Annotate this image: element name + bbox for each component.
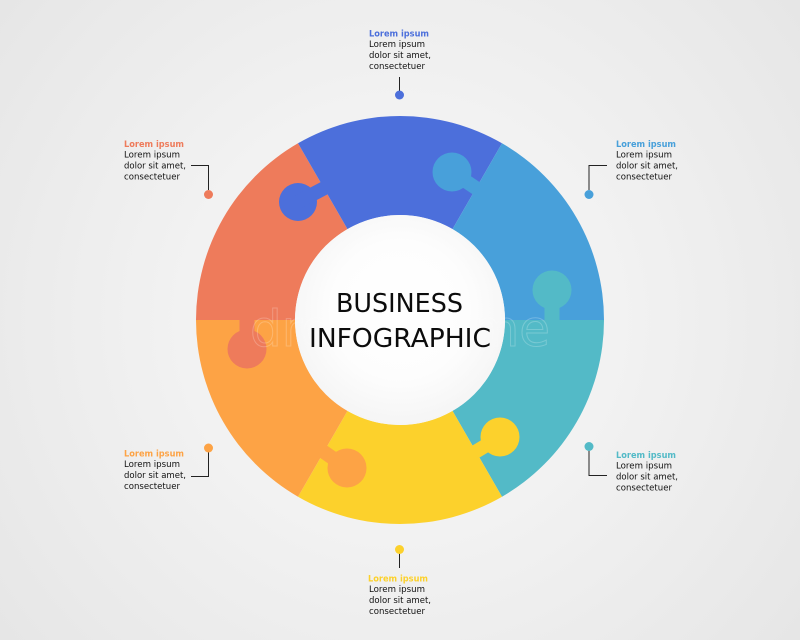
- puzzle knob: light blue: [432, 152, 480, 192]
- callout: top blue: Lorem ipsum: [369, 39, 425, 50]
- puzzle knob: yellow: [472, 418, 520, 456]
- callout: upper right light blue: Lorem ipsum: [616, 150, 672, 160]
- callout: top blue: dolor sit amet,: [369, 50, 431, 61]
- callout: lower right teal: consectetuer: [616, 482, 672, 494]
- callout: lower left orange: consectetuer: [124, 481, 180, 492]
- segment: red-orange: [196, 143, 348, 320]
- segment: orange: [196, 320, 348, 497]
- center title: INFOGRAPHIC: [309, 324, 491, 354]
- center title: BUSINESS: [336, 289, 463, 319]
- puzzle ring chart: [196, 116, 604, 524]
- callout: upper right light blue: [584, 139, 678, 199]
- callout: upper right light blue: Lorem ipsum: [616, 139, 676, 150]
- callout: lower right teal: dolor sit amet,: [616, 472, 678, 482]
- center circle: [295, 215, 505, 425]
- callout: bottom yellow: dolor sit amet,: [369, 595, 431, 606]
- puzzle knob: blue: [279, 183, 328, 221]
- callout: upper left red-orange: dolor sit amet,: [124, 160, 186, 172]
- callout: top blue: Lorem ipsum: [369, 28, 429, 40]
- segment: blue: [298, 116, 502, 229]
- callout: upper left red-orange: [124, 139, 213, 199]
- callout: top blue: consectetuer: [369, 61, 425, 72]
- callout: upper left red-orange: Lorem ipsum: [124, 139, 184, 150]
- puzzle knob: red-orange: [228, 320, 266, 368]
- puzzle knob: orange: [320, 448, 366, 488]
- callout: lower left orange: dolor sit amet,: [124, 470, 186, 481]
- callout: lower right teal: [584, 442, 678, 494]
- center title: [309, 289, 491, 354]
- callout: bottom yellow: consectetuer: [369, 606, 425, 617]
- callout: bottom yellow: Lorem ipsum: [368, 574, 428, 584]
- callout: upper right light blue: consectetuer: [616, 172, 672, 182]
- callout: bottom yellow: [368, 545, 431, 617]
- puzzle knob: teal: [532, 270, 572, 320]
- callout: lower right teal: Lorem ipsum: [616, 460, 672, 472]
- callout: lower left orange: Lorem ipsum: [124, 448, 184, 460]
- watermark: dreamstime: [250, 300, 550, 358]
- callout: bottom yellow: Lorem ipsum: [369, 584, 425, 595]
- callout: lower left orange: [124, 444, 213, 492]
- callout: upper left red-orange: Lorem ipsum: [124, 150, 180, 160]
- segment: light blue: [452, 143, 604, 320]
- callout: upper left red-orange: consectetuer: [124, 172, 180, 182]
- callout: top blue: [369, 28, 431, 100]
- callout: upper right light blue: dolor sit amet,: [616, 160, 678, 172]
- callout: lower left orange: Lorem ipsum: [124, 459, 180, 470]
- callout: lower right teal: Lorem ipsum: [616, 450, 676, 461]
- segment: yellow: [298, 411, 502, 524]
- segment: teal: [452, 320, 604, 497]
